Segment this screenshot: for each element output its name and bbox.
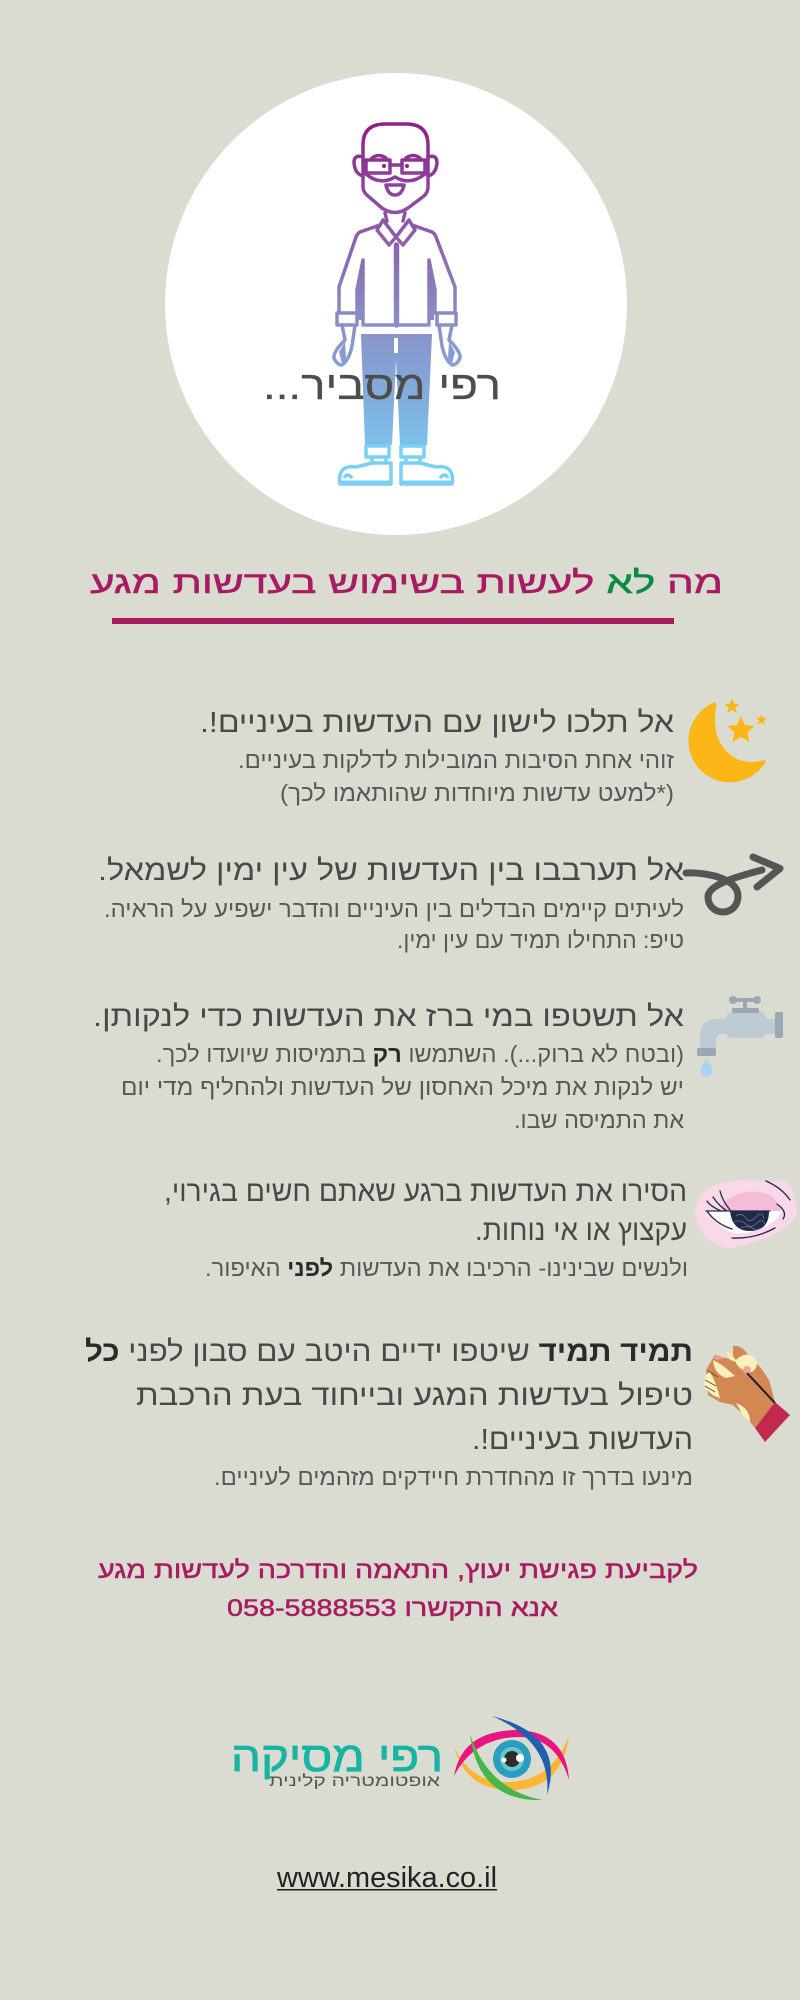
tip 3: tap water: את התמיסה שבו. xyxy=(514,1107,685,1133)
heading: explains: רפי מסביר... xyxy=(263,364,501,408)
tip 3: tap water: אל תשטפו במי ברז את העדשות כדי לנקותן. xyxy=(93,1001,684,1033)
tip 5: wash hands: מינעו בדרך זו מהחדרת חיידקים מזהמים לעיניים. xyxy=(214,1464,693,1490)
tip 3: tap water: (ובטח לא ברוק...). השתמשו רק בתמיסות שיועדו לכך. xyxy=(156,1041,684,1067)
logo xyxy=(231,1716,569,1800)
icon: bearded man with glasses xyxy=(334,124,460,365)
tip 3: tap water: יש לנקות את מיכל האחסון של העדשות ולהחליף מדי יום xyxy=(121,1074,684,1100)
tip 1: sleep: אל תלכו לישון עם העדשות בעיניים!. xyxy=(200,707,674,739)
icon: moon and stars xyxy=(688,698,767,782)
tip 3: tap water xyxy=(93,1001,685,1133)
tip 2: left and right: אל תערבבו בין העדשות של עין ימין לשמאל. xyxy=(98,855,684,887)
tip 1: sleep xyxy=(200,707,675,806)
icon: trousers xyxy=(361,334,432,445)
logo eye icon xyxy=(454,1716,569,1800)
panel: white circle with character xyxy=(165,73,627,535)
tip 4: irritation: ולנשים שבינינו- הרכיבו את העדשות לפני האיפור. xyxy=(205,1255,688,1281)
icon: faucet xyxy=(697,996,783,1077)
title underline xyxy=(112,618,674,624)
tip 2: left and right: לעיתים קיימים הבדלים בין העיניים והדבר ישפיע על הראיה. xyxy=(104,896,684,922)
icon: soapy hands xyxy=(704,1346,790,1442)
title: מה לא לעשות בשימוש בעדשות מגע xyxy=(90,565,723,600)
website link: www.mesika.co.il xyxy=(276,1862,497,1894)
tip 5: wash hands: העדשות בעיניים!. xyxy=(472,1424,693,1456)
logo tagline: אופטומטריה קלינית xyxy=(269,1772,440,1790)
call to action xyxy=(98,1557,698,1622)
icon: looped arrow xyxy=(686,857,780,912)
tip 4: irritation xyxy=(164,1176,688,1281)
call to action: אנא התקשרו 058-5888553 xyxy=(227,1595,558,1622)
tip 2: left and right xyxy=(98,855,684,953)
tip 2: left and right: טיפ: התחילו תמיד עם עין ימין. xyxy=(397,927,684,953)
tip 4: irritation: הסירו את העדשות ברגע שאתם חשים בגירוי, xyxy=(164,1176,687,1208)
icon: shoes xyxy=(340,446,452,484)
logo wordmark: רפי מסיקה xyxy=(231,1733,443,1780)
tip 5: wash hands: טיפול בעדשות המגע ובייחוד בעת הרכבת xyxy=(136,1380,693,1412)
tip 5: wash hands xyxy=(85,1336,693,1490)
tip 4: irritation: עקצוץ או אי נוחות. xyxy=(475,1215,687,1247)
icon: irritated eye xyxy=(695,1180,797,1248)
tip 5: wash hands: תמיד תמיד שיטפו ידיים היטב עם סבון לפני כל xyxy=(85,1336,693,1368)
call to action: לקביעת פגישת יעוץ, התאמה והדרכה לעדשות מגע xyxy=(98,1557,698,1584)
tip 1: sleep: (*למעט עדשות מיוחדות שהותאמו לכך) xyxy=(280,780,674,806)
tip 1: sleep: זוהי אחת הסיבות המובילות לדלקות בעיניים. xyxy=(238,747,675,773)
